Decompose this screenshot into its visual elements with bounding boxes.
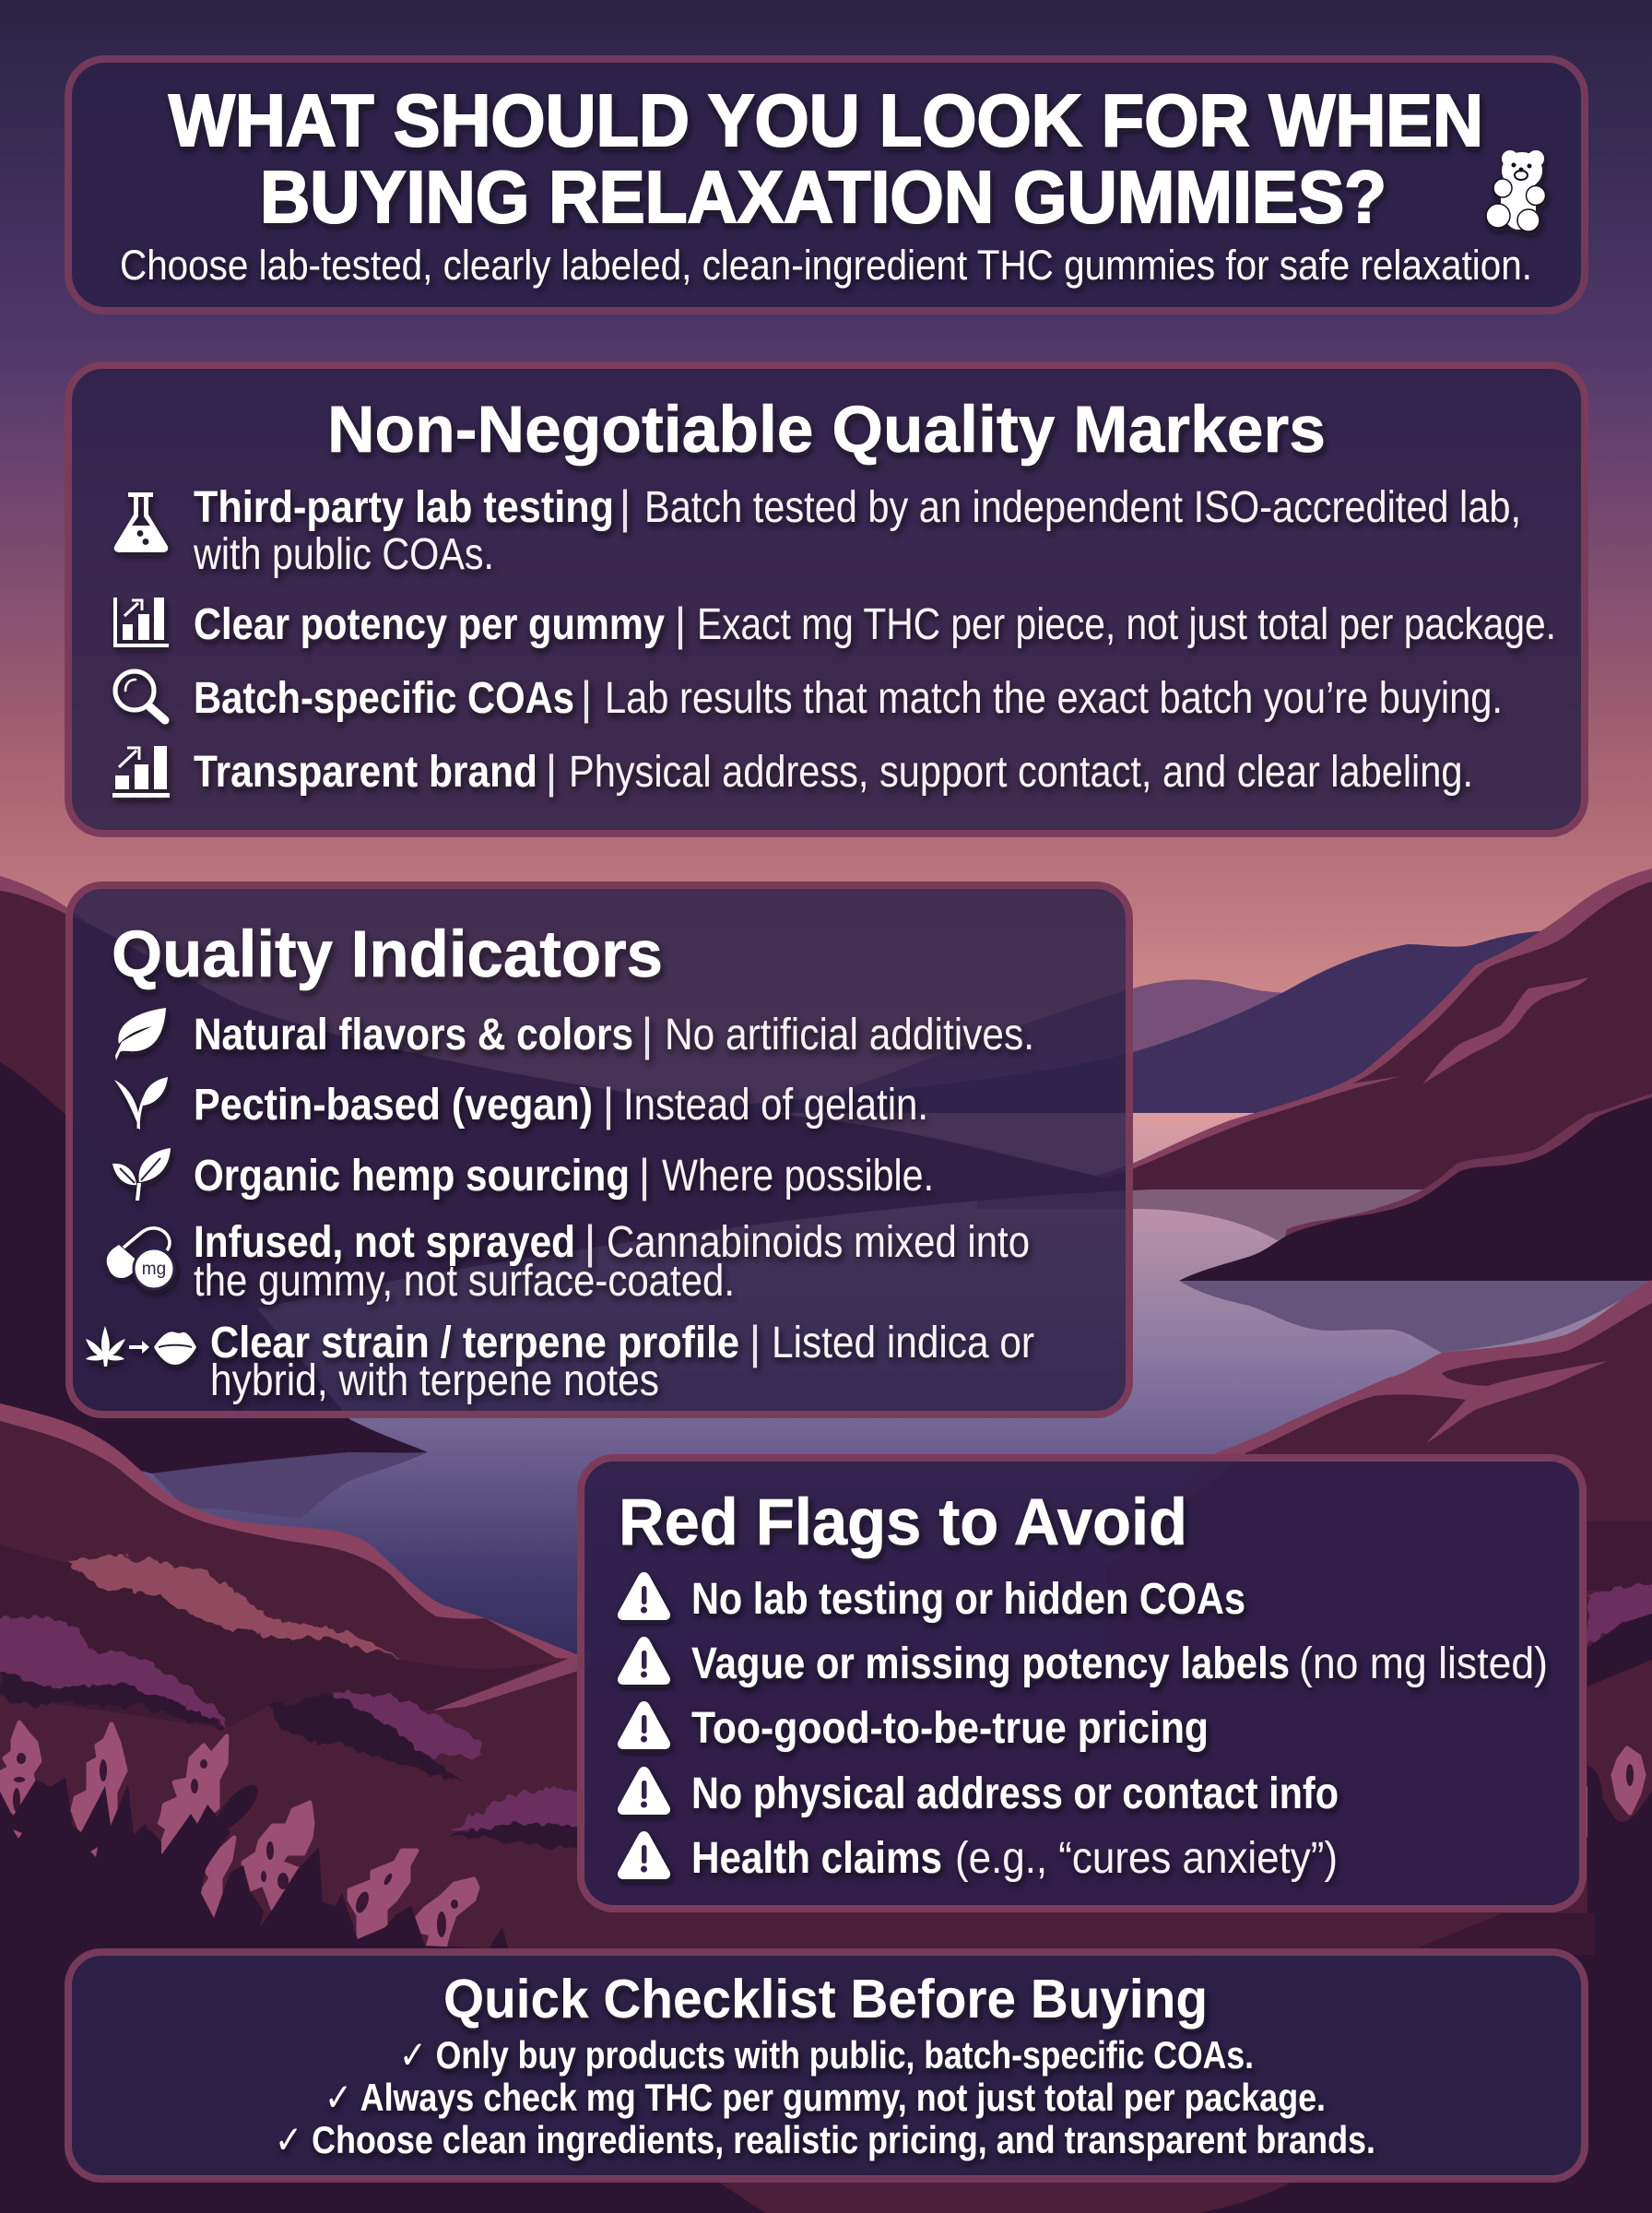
item: batch-specific COAs [194,672,1503,724]
checklist lines: ✓ Only buy products with public, batch-specific COAs. [399,2033,1254,2077]
item: transparent brand: Physical address, support contact, and clear labeling. [569,748,1473,797]
item: batch-specific COAs: Lab results that match the exact batch you’re buying. [605,674,1503,723]
item: health claims: Health claims [691,1834,942,1883]
item: pectin-based: | [603,1079,614,1130]
item: natural flavors [194,1009,1034,1060]
item: pectin-based [194,1079,928,1130]
dark hill reflection [1179,1281,1652,1353]
checklist lines [275,2033,1375,2161]
dark hill rim and body [1272,1094,1652,1281]
right edge hill bands, purple bush and dark base [1587,1521,1652,1591]
subtitle: Choose lab-tested, clearly labeled, clean-ingredient THC gummies for safe relaxation. [120,242,1532,289]
far mauve hill [784,979,1291,1113]
item: third-party lab testing: | [620,481,631,533]
item: clear potency per gummy: Clear potency per gummy [194,600,665,649]
item: vague potency labels: (no mg listed) [1299,1639,1548,1688]
panel: red flags to avoid [581,1458,1583,1909]
item: pectin-based: Instead of gelatin. [623,1081,928,1130]
checklist lines: ✓ Always check mg THC per gummy, not just total per package. [324,2076,1326,2119]
icon: warning triangle [618,1572,670,1620]
item: third-party lab testing: Third-party lab testing [194,483,614,532]
right hill rim streak [1422,977,1588,1084]
icon: pill with mg [107,1228,174,1289]
dark bush shadow centre [267,1694,463,1782]
item: natural flavors: No artificial additives. [665,1011,1034,1059]
rising right rim at Red Flags panel edge [432,1651,590,1710]
icon: warning triangle [618,1767,670,1815]
item: organic hemp: Where possible. [662,1152,934,1201]
foreground lavender stalks [0,1722,1644,1948]
dark bush shadow left [0,1669,226,1729]
heading: Red Flags to Avoid [619,1486,1187,1559]
purple heather bush centre [334,1690,483,1757]
icon: gummy bear [1486,150,1545,231]
item: infused not sprayed: | [584,1216,596,1268]
item: clear strain terpene: Listed indica or [772,1319,1034,1367]
item: infused not sprayed: Infused, not sprayed [194,1218,575,1267]
item: third-party lab testing: with public COAs. [193,530,494,579]
title: WHAT SHOULD YOU LOOK FOR WHEN [169,79,1483,161]
icon: bar chart with arrow [113,598,169,647]
distant left hill behind quality panel [0,885,1152,1355]
lower right hill rim and body [1106,1280,1652,1955]
right maroon hill rim and body [1042,869,1652,1189]
item: third-party lab testing: Batch tested by an independent ISO-accredited lab, [644,483,1521,532]
stalk gaps [13,1753,1634,1937]
item: clear strain terpene [210,1317,1034,1405]
item: transparent brand [194,746,1473,798]
item: vague potency labels: Vague or missing potency labels [691,1639,1290,1688]
item: clear potency per gummy [194,598,1556,650]
icon: pill with mg: mg [142,1260,166,1279]
icon: warning triangle [618,1637,670,1685]
panel: quick checklist [68,1952,1585,2179]
blue-purple hill [645,930,1549,1113]
checklist lines: ✓ Choose clean ingredients, realistic pricing, and transparent brands. [275,2118,1375,2161]
pink heather bush [68,1555,403,1660]
item: health claims [691,1834,1338,1883]
small lavender flecks [13,1829,98,1857]
foreground dark meadow [0,1778,509,2213]
icon: magnifying glass [115,671,165,720]
panel: title [68,59,1585,311]
icon: sprout [112,1148,171,1201]
left big hill rim and body [0,1403,590,1964]
item: transparent brand: | [546,746,557,798]
mid dark band [0,1544,553,1729]
icon: warning triangle [618,1831,670,1879]
icon: vegan V leaf [114,1077,168,1130]
item: no physical address: No physical address or contact info [691,1769,1339,1818]
icon: leaf [115,1008,166,1060]
heading: Non-Negotiable Quality Markers [327,394,1326,467]
icon: flask [114,492,168,552]
item: no lab testing: No lab testing or hidden COAs [691,1575,1245,1624]
item: natural flavors: | [642,1009,653,1060]
item: clear potency per gummy: | [675,598,686,650]
item: clear strain terpene: Clear strain / terpene profile [210,1319,739,1367]
panel: non-negotiable quality markers [68,365,1585,834]
item: transparent brand: Transparent brand [194,748,537,797]
item: organic hemp: Organic hemp sourcing [194,1152,630,1201]
heading: Quick Checklist Before Buying [443,1969,1208,2030]
title: BUYING RELAXATION GUMMIES? [260,156,1386,238]
heading: Quality Indicators [112,918,663,991]
item: infused not sprayed [194,1216,1030,1306]
item: infused not sprayed: Cannabinoids mixed into [607,1218,1030,1267]
item: batch-specific COAs: | [581,672,592,724]
item: clear strain terpene: | [749,1317,761,1368]
icon: rising bars [112,746,170,798]
left lake spit reflection [152,1452,428,1519]
item: pectin-based: Pectin-based (vegan) [194,1081,593,1130]
bottom dark strip [0,2176,1652,2213]
item: batch-specific COAs: Batch-specific COAs [194,674,574,723]
lower right branch [1426,1361,1608,1443]
item: natural flavors: Natural flavors & colors [194,1011,633,1059]
item: too-good pricing: Too-good-to-be-true pricing [691,1704,1209,1753]
item: organic hemp [194,1150,934,1201]
title [169,79,1483,238]
purple bush near Red Flags panel, with shadow [446,1821,590,1853]
purple heather bush left [0,1616,226,1727]
icon: warning triangle [618,1701,670,1749]
reflection of right hill [977,1189,1493,1240]
filler maroon ground beneath red flags panel [553,1697,1198,1964]
item: clear strain terpene: hybrid, with terpene notes [210,1356,659,1405]
item: health claims: (e.g., “cures anxiety”) [955,1834,1338,1883]
item: third-party lab testing [193,481,1521,579]
item: organic hemp: | [638,1150,651,1201]
item: infused not sprayed: the gummy, not surface-coated. [194,1257,735,1306]
panel: quality indicators [69,885,1129,1414]
icon: cannabis leaf to lips [86,1326,196,1367]
